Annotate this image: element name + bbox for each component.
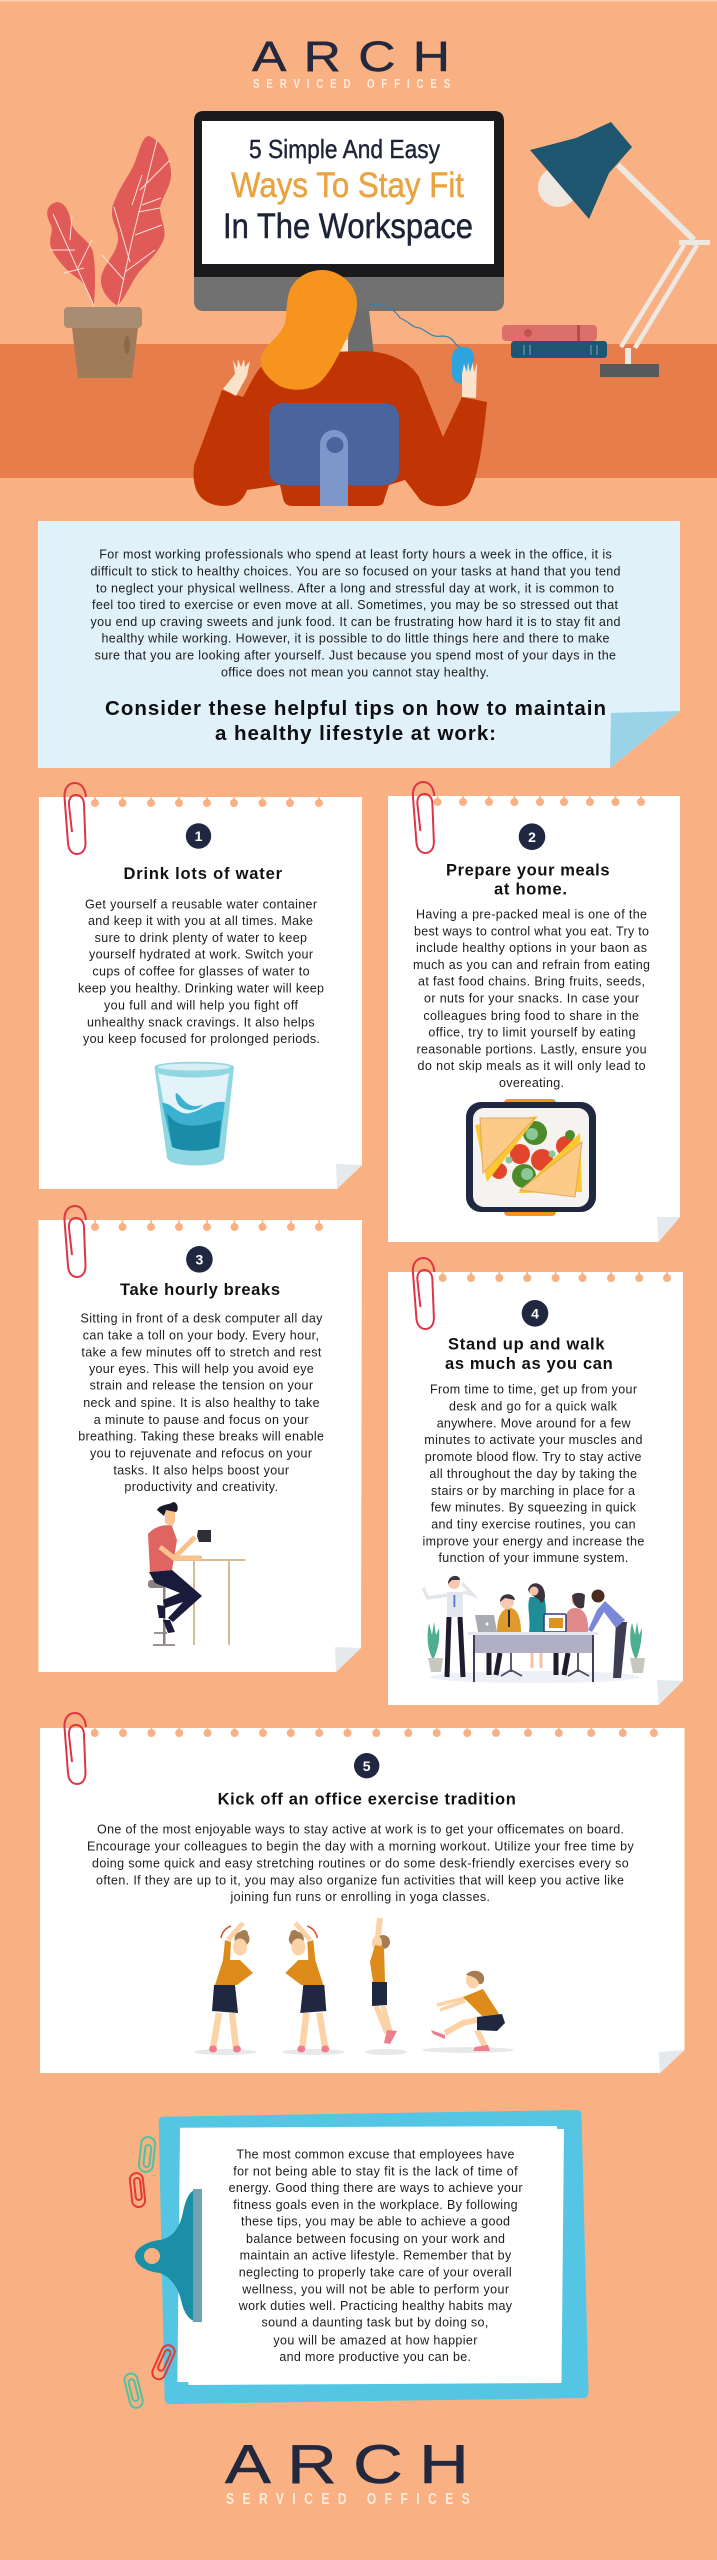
panel: tip 5 [40, 1713, 684, 2073]
conclusion text: balance between focusing on your work and [246, 2232, 505, 2246]
number badge 5 [354, 1753, 379, 1778]
body text: sure to drink plenty of water to keep [95, 931, 307, 945]
illustration: stretching figures [194, 1918, 514, 2055]
table [468, 1632, 598, 1635]
plants [428, 1622, 439, 1660]
number badge 3 [186, 1246, 213, 1273]
icon: paperclip [64, 1713, 86, 1784]
body text: desk and go for a quick walk [449, 1399, 618, 1413]
body text [78, 1312, 324, 1494]
logo: top: ARCH [252, 33, 450, 81]
body text: your eyes. This will help you avoid eye [89, 1362, 314, 1376]
body text [422, 1383, 644, 1565]
body text: One of the most enjoyable ways to stay active at work is to get your officemates on board. [97, 1823, 624, 1837]
clipboard clip [135, 2189, 202, 2322]
conclusion text: and more productive you can be. [279, 2350, 471, 2364]
intro text: feel too tired to exercise or even move at all. Sometimes, you may be so stressed out that [92, 598, 619, 612]
body text: doing some quick and easy stretching routines or do some desk-friendly exercises every so [92, 1856, 629, 1870]
plant [47, 136, 171, 378]
hero illustration [0, 111, 717, 506]
body text: you keep focused for prolonged periods. [83, 1032, 320, 1046]
heading: at home. [494, 881, 567, 899]
number badge 3: 3 [196, 1252, 204, 1268]
number badge 2: 2 [528, 829, 536, 845]
illustration: man with coffee [148, 1502, 246, 1645]
standing man [447, 1617, 463, 1677]
body text: often. If they are up to it, you may also organize fun activities that will keep you active like [96, 1873, 624, 1887]
body text: cups of coffee for glasses of water to [92, 964, 310, 978]
icon: paperclip [64, 1206, 86, 1277]
heading: Take hourly breaks [120, 1281, 280, 1299]
panel: clipboard conclusion [123, 2110, 588, 2409]
hands [223, 359, 250, 396]
intro text: you end up craving sweets and junk food. It can be frustrating how hard it is to stay fit and [90, 615, 621, 629]
seated and standing colleagues [489, 1653, 568, 1675]
lamp [530, 122, 710, 377]
leaning man [613, 1622, 627, 1678]
icon: glass of water [154, 1062, 234, 1166]
body text: much as you can and refrain from eating [413, 958, 650, 972]
conclusion text: wellness, you will not be able to perform your [241, 2282, 509, 2296]
body text: keep you healthy. Drinking water will keep [78, 981, 324, 995]
body text: stairs or by marching in place for a [431, 1484, 635, 1498]
logo: top: SERVICED OFFICES [253, 78, 451, 91]
panel: tip 4 [388, 1258, 683, 1705]
heading [445, 1335, 613, 1373]
body text: take a few minutes off to stretch and rest [81, 1345, 322, 1359]
body text: improve your energy and increase the [422, 1534, 644, 1548]
figure 2 [282, 1923, 344, 2055]
body text: yourself hydrated at work. Switch your [89, 948, 313, 962]
panel: tip 2 [388, 782, 680, 1242]
body text: all throughout the day by taking the [429, 1467, 637, 1481]
conclusion text: The most common excuse that employees have [236, 2147, 514, 2161]
conclusion text: fitness goals even in the workplace. By following [233, 2198, 518, 2212]
number badge 5: 5 [363, 1758, 371, 1774]
intro heading: Consider these helpful tips on how to maintain [105, 697, 606, 720]
heading: as much as you can [445, 1355, 613, 1373]
body text: anywhere. Move around for a few [437, 1416, 631, 1430]
body text [87, 1823, 634, 1904]
intro text: healthy while working. However, it is possible to do little things here and there to make [102, 632, 610, 646]
conclusion text: sound a daunting task but by doing so, [262, 2316, 488, 2330]
body text: you to rejuvenate and refocus on your [90, 1447, 312, 1461]
panel: tip 1 [39, 783, 362, 1189]
mouse and cable [370, 305, 474, 384]
icon: lunchbox [466, 1099, 596, 1216]
desk band [0, 344, 717, 478]
body text: function of your immune system. [438, 1551, 628, 1565]
panel: tip 3 [38, 1206, 362, 1672]
conclusion text: work duties well. Practicing healthy habits may [238, 2299, 513, 2313]
heading: Drink lots of water [124, 865, 283, 883]
number badge 1: 1 [195, 828, 203, 844]
body text: From time to time, get up from your [430, 1383, 637, 1397]
conclusion text: these tips, you may be able to achieve a good [241, 2215, 510, 2229]
books [502, 325, 607, 358]
paper [177, 2126, 564, 2385]
monitor stand [347, 310, 374, 356]
intro text: For most working professionals who spend at least forty hours a week in the office, it is [99, 547, 612, 561]
conclusion text: neglecting to properly take care of your overall [239, 2266, 512, 2280]
conclusion text: for not being able to stay fit is the lack of time of [233, 2164, 518, 2178]
icon: paperclip [64, 783, 86, 854]
body text: few minutes. By squeezing in quick [431, 1501, 637, 1515]
person [194, 270, 487, 506]
intro heading: a healthy lifestyle at work: [215, 722, 496, 745]
body text: tasks. It also helps boost your [113, 1463, 289, 1477]
body text: reasonable portions. Lastly, ensure you [416, 1042, 647, 1056]
monitor [194, 111, 504, 311]
logo: bottom: SERVICED OFFICES [226, 2489, 470, 2507]
body text: neck and spine. It is also healthy to take [83, 1396, 320, 1410]
heading: Prepare your meals [446, 862, 610, 880]
screen title [223, 134, 473, 246]
body text: overeating. [499, 1076, 564, 1090]
intro text: office does not mean you cannot stay healthy. [221, 666, 489, 680]
conclusion text: maintain an active lifestyle. Remember that by [240, 2249, 512, 2263]
body text: do not skip meals as it will only lead to [418, 1059, 646, 1073]
intro heading [105, 697, 606, 745]
number badge 4: 4 [531, 1306, 539, 1322]
body text: at fast food chains. Bring fruits, seeds, [418, 975, 645, 989]
body text: breathing. Taking these breaks will enable [78, 1430, 324, 1444]
body text: or nuts for your snacks. In case your [424, 992, 639, 1006]
screen title: Ways To Stay Fit [231, 166, 464, 205]
body text: Sitting in front of a desk computer all day [80, 1312, 323, 1326]
conclusion text: energy. Good thing there are ways to achieve your [229, 2181, 523, 2195]
body text: Having a pre-packed meal is one of the [416, 908, 647, 922]
body text: strain and release the tension on your [90, 1379, 313, 1393]
body text: unhealthy snack cravings. It also helps [87, 1015, 315, 1029]
icon: paperclip [413, 1258, 434, 1329]
body text: and keep it with you at all times. Make [88, 914, 313, 928]
body text: you full and will help you fight off [104, 998, 299, 1012]
intro text [90, 547, 621, 680]
body text: promote blood flow. Try to stay active [425, 1450, 642, 1464]
conclusion text: you will be amazed at how happier [273, 2333, 477, 2347]
number badge 1 [186, 823, 211, 849]
body text: Encourage your colleagues to begin the day with a morning workout. Utilize your free time by [87, 1840, 634, 1854]
body text: productivity and creativity. [124, 1480, 278, 1494]
number badge 2 [519, 823, 545, 850]
heading: Stand up and walk [448, 1335, 605, 1353]
heading: Kick off an office exercise tradition [218, 1790, 516, 1808]
paper clips [123, 2136, 177, 2409]
heading [446, 862, 610, 899]
screen title: In The Workspace [223, 207, 473, 246]
body text: best ways to control what you eat. Try to [414, 924, 649, 938]
conclusion text [229, 2147, 523, 2364]
body text: minutes to activate your muscles and [424, 1433, 642, 1447]
figure 3 [365, 1918, 407, 2055]
body text: colleagues bring food to share in the [423, 1009, 639, 1023]
body text: joining fun runs or enrolling in yoga classes. [230, 1890, 490, 1904]
body text: and tiny exercise routines, you can [431, 1518, 636, 1532]
icon: paperclip [413, 782, 434, 853]
illustration: team at table [423, 1576, 645, 1683]
body text [413, 908, 650, 1090]
figure 1 [194, 1923, 256, 2055]
body text: can take a toll on your body. Every hour, [83, 1328, 319, 1342]
number badge 4 [522, 1300, 548, 1327]
intro text: difficult to stick to healthy choices. You are so focused on your tasks at hand that you tend [90, 565, 621, 579]
intro text: to neglect your physical wellness. After a long and stressful day at work, it is common to [96, 581, 614, 595]
logo: bottom: ARCH [225, 2434, 469, 2495]
body text: a minute to pause and focus on your [94, 1413, 309, 1427]
body text: Get yourself a reusable water container [85, 897, 317, 911]
body text: office, try to limit yourself by eating [428, 1026, 636, 1040]
screen title: 5 Simple And Easy [249, 134, 440, 164]
intro text: sure that you are looking after yourself. Just because you spend most of your days in the [95, 648, 616, 662]
figure 4 [422, 1971, 514, 2053]
clipboard board [159, 2110, 588, 2404]
body text: include healthy options in your baon as [416, 941, 647, 955]
chair [269, 403, 399, 506]
panel: intro [38, 521, 680, 768]
body text [78, 897, 324, 1046]
